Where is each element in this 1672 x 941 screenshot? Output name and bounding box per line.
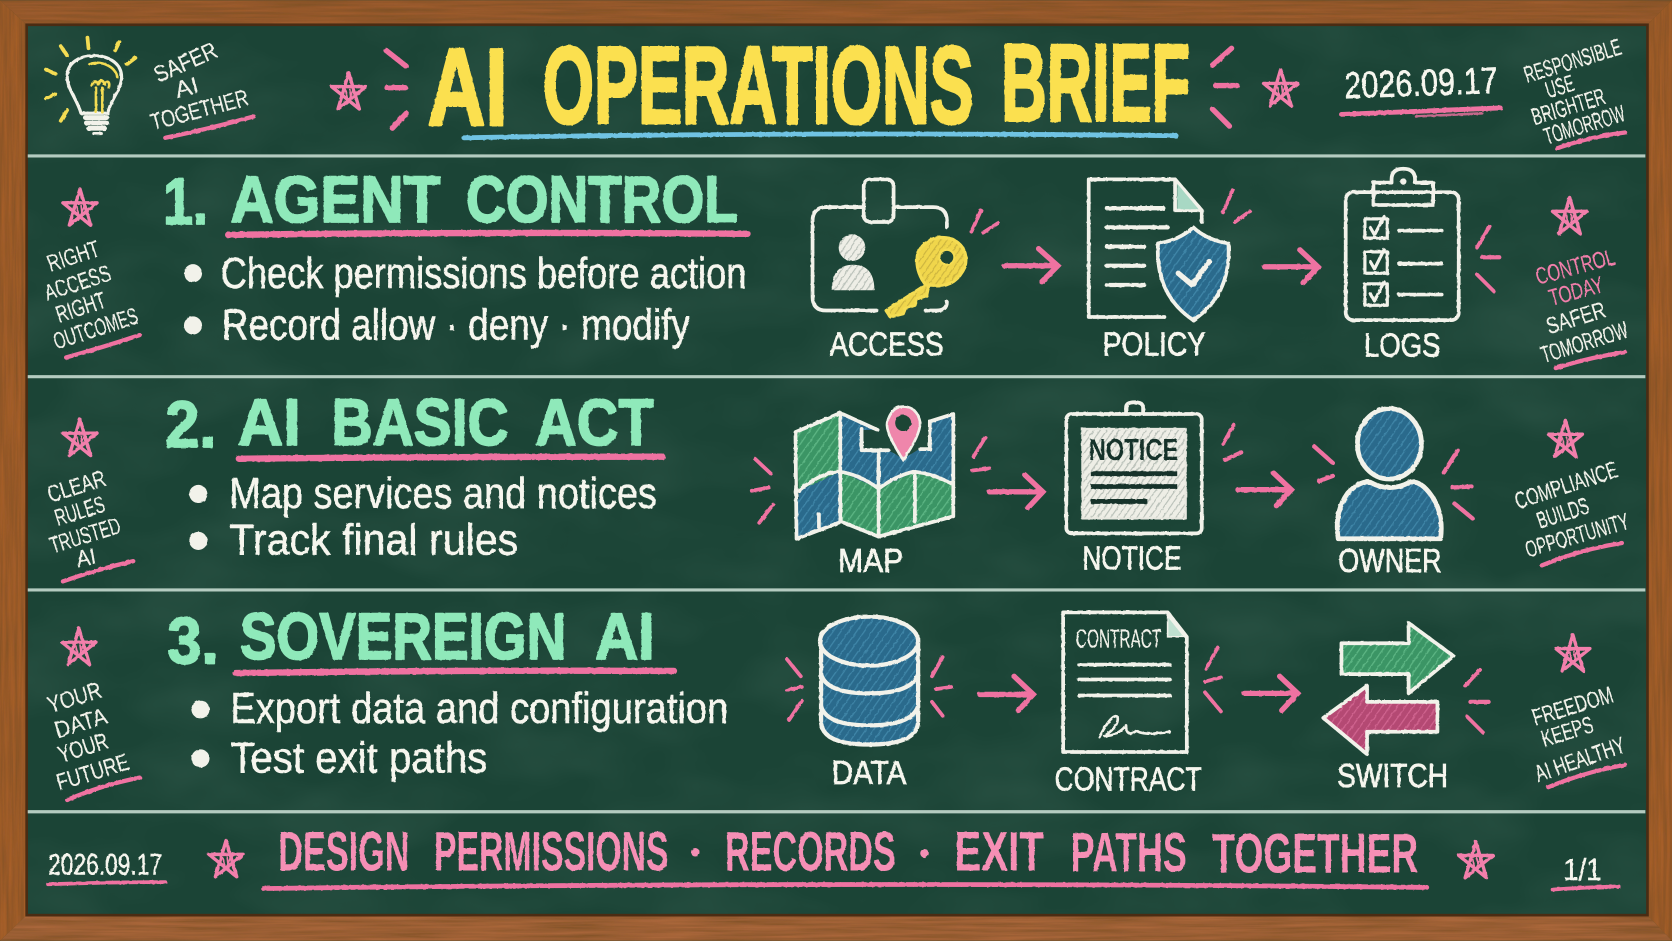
bullets: Test exit paths	[230, 733, 487, 782]
icon labels: MAP	[838, 543, 903, 580]
panel: sovereign AI	[44, 600, 1629, 800]
spark marks right of title	[1212, 48, 1237, 126]
closing message: PATHS	[1071, 821, 1187, 883]
heading underline	[239, 457, 662, 459]
heading: 3.	[167, 605, 219, 679]
motto: safer AI together: AI	[172, 72, 201, 103]
left note: RIGHT	[52, 287, 109, 327]
icon: notice board	[1066, 402, 1241, 533]
closing message: PERMISSIONS	[434, 820, 669, 882]
footer date: 2026.09.17	[48, 849, 162, 882]
bullets	[184, 249, 746, 349]
icon: owner person	[1314, 409, 1473, 539]
heading: SOVEREIGN	[240, 600, 566, 674]
title: BRIEF	[1001, 23, 1190, 145]
heading	[163, 163, 738, 239]
icon labels: ACCESS	[830, 326, 944, 363]
bullets: Map services and notices	[229, 469, 657, 518]
right note: COMPLIANCE	[1511, 456, 1621, 514]
icon: map with pin	[752, 407, 990, 539]
panel: agent control	[41, 163, 1631, 368]
arrow	[1244, 676, 1298, 710]
bullets	[191, 684, 728, 782]
icon: switch arrows	[1323, 623, 1489, 754]
icon: notice board: NOTICE	[1089, 432, 1178, 467]
right note: AI HEALTHY	[1531, 732, 1629, 787]
right note	[1511, 420, 1632, 565]
motto: responsible use: USE	[1542, 70, 1577, 103]
icon labels: LOGS	[1364, 327, 1441, 364]
left note: TRUSTED	[47, 512, 124, 558]
title: AI	[428, 27, 508, 149]
panel: AI basic act	[44, 386, 1632, 581]
left note	[41, 189, 141, 357]
icon labels: CONTRACT	[1055, 761, 1202, 798]
bullets: Check permissions before action	[221, 249, 746, 298]
left note: RULES	[51, 491, 108, 531]
icon labels: SWITCH	[1337, 758, 1448, 795]
heading underline	[228, 233, 747, 235]
left note	[44, 628, 140, 800]
star left of title	[332, 73, 366, 109]
heading: AI	[595, 600, 655, 674]
message underline	[263, 884, 1427, 888]
motto: safer AI together	[148, 37, 254, 138]
icon labels	[838, 541, 1442, 580]
left note: AI	[74, 543, 98, 572]
arrow	[1004, 249, 1058, 282]
left note: OUTCOMES	[50, 303, 141, 354]
arrow	[1238, 473, 1291, 506]
left note	[44, 419, 133, 581]
right note	[1533, 198, 1631, 368]
bullets: Track final rules	[229, 516, 518, 565]
star	[1459, 842, 1493, 878]
right note: KEEPS	[1538, 711, 1597, 752]
heading: ACT	[535, 386, 654, 460]
heading: 2.	[165, 388, 216, 462]
motto: safer AI together: TOGETHER	[148, 84, 251, 135]
icon labels	[832, 755, 1448, 798]
motto: safer AI together: SAFER	[150, 37, 221, 88]
header panel	[46, 23, 1628, 149]
right note: CONTROL	[1533, 244, 1618, 290]
page number	[1553, 852, 1619, 890]
bullets: Export data and configuration	[230, 684, 728, 733]
star right of title	[1264, 70, 1298, 106]
heading: 1.	[163, 165, 208, 239]
arrow	[980, 676, 1033, 710]
heading: BASIC	[332, 386, 509, 460]
closing message: DESIGN	[278, 820, 409, 882]
left note: YOUR	[44, 677, 105, 718]
arrow	[990, 475, 1043, 508]
footer panel	[48, 820, 1619, 890]
icon labels: POLICY	[1103, 326, 1206, 363]
left note: DATA	[52, 703, 110, 743]
right note: BUILDS	[1534, 492, 1592, 534]
closing message: TOGETHER	[1212, 823, 1418, 885]
motto: responsible use: BRIGHTER	[1528, 83, 1608, 130]
right note	[1529, 635, 1629, 787]
left note: CLEAR	[44, 465, 109, 507]
icon: database	[787, 617, 951, 745]
icon: logs clipboard	[1346, 169, 1499, 320]
star	[209, 841, 243, 877]
left note: FUTURE	[53, 749, 132, 795]
right note: SAFER	[1543, 297, 1609, 339]
left note: ACCESS	[41, 260, 114, 306]
arrow	[1265, 250, 1318, 283]
closing message: RECORDS	[725, 820, 896, 882]
right note: TODAY	[1546, 271, 1606, 311]
icon labels: DATA	[832, 755, 906, 792]
heading	[165, 386, 654, 462]
right note: FREEDOM	[1529, 681, 1616, 731]
heading underline	[236, 671, 674, 673]
closing message: EXIT	[954, 820, 1044, 882]
title: OPERATIONS	[543, 25, 974, 147]
heading: AI	[238, 386, 301, 460]
icon labels: NOTICE	[1082, 541, 1181, 578]
icon: contract: CONTRACT	[1076, 626, 1161, 654]
icon: policy document with shield	[1089, 179, 1250, 320]
bullets	[189, 469, 657, 565]
icon labels: OWNER	[1338, 543, 1442, 580]
left note: YOUR	[55, 728, 111, 767]
date: 2026.09.17	[1343, 59, 1498, 106]
motto: responsible use	[1521, 34, 1628, 149]
icon labels	[830, 326, 1441, 364]
date	[1341, 59, 1500, 116]
closing message	[278, 820, 1418, 885]
left note: RIGHT	[44, 235, 103, 277]
spark marks left of title	[386, 50, 406, 128]
bullets: Record allow · deny · modify	[222, 300, 690, 349]
icon: access badge and key	[813, 179, 998, 317]
heading: AGENT	[230, 163, 440, 237]
icon: light bulb	[46, 38, 135, 134]
icon: contract	[1063, 612, 1221, 752]
page number: 1/1	[1563, 852, 1602, 887]
heading: CONTROL	[466, 163, 738, 237]
title underline	[464, 134, 1176, 138]
